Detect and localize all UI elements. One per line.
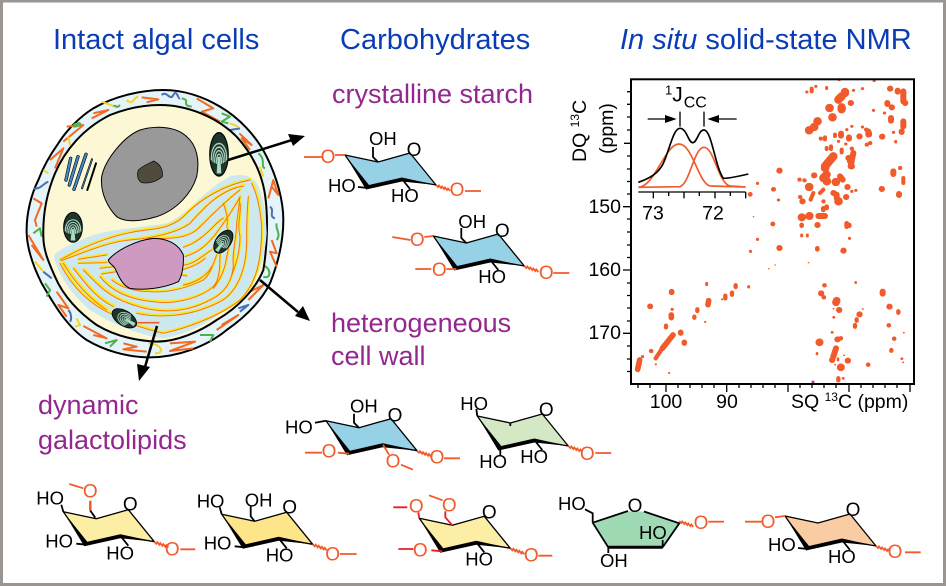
sugar: galactolipid unit 2 (197, 489, 357, 565)
y tick labels: 150 (588, 196, 621, 218)
y tick labels: 160 (588, 259, 621, 281)
upper-right peak cluster (799, 80, 905, 201)
x tick labels: 90 (716, 391, 738, 413)
sugar: galactolipid unit 1: O (83, 482, 98, 503)
y axis title: DQ (569, 133, 591, 162)
x axis title: 13 (825, 390, 838, 404)
sugar: furanose green unit: HO (558, 493, 586, 514)
heading: Carbohydrates: Carbohydrates (340, 24, 530, 56)
nucleolus (137, 161, 163, 183)
mitochondrion bottom (109, 305, 140, 332)
nucleus (101, 127, 198, 221)
inset J label: J (672, 84, 683, 107)
y tick labels (588, 196, 621, 344)
NMR spectrum panel (568, 79, 914, 413)
sugar: crystalline starch unit 2: O (495, 221, 510, 242)
experimental doublet (638, 128, 748, 182)
pyrenoid (108, 238, 183, 289)
cytoplasm (43, 105, 267, 342)
lower-right peaks (817, 282, 904, 380)
sugar: crystalline starch unit 1: O (407, 140, 421, 161)
sugar: crystalline starch unit 2: O (432, 260, 447, 281)
sugar: galactolipid unit 1: HO (45, 531, 73, 552)
sugar: cell wall blue unit: O (386, 452, 400, 473)
inset axis (638, 192, 746, 198)
x axis title: SQ (791, 391, 819, 413)
sugar: crystalline starch unit 2: OH (458, 211, 486, 232)
inset: 1J CC doublet (638, 112, 748, 198)
sugar: crystalline starch unit 1: O (450, 180, 464, 201)
sugar: galactolipid unit 2: HO (266, 544, 293, 565)
sugar: peach unit: O (888, 542, 902, 563)
sugar: galactolipid unit 1: O (165, 540, 180, 561)
sugar: cell wall green unit: O (580, 444, 595, 465)
label: crystalline starch: crystalline starch (332, 79, 533, 109)
x axis tick marks (638, 384, 910, 392)
cell wall polysaccharide squiggles (28, 93, 279, 353)
chloroplast and thylakoids (54, 175, 267, 338)
sugar: galactolipid unit 2: O (282, 497, 297, 518)
sugar: peach unit: HO (828, 546, 856, 567)
sugar: galactolipid unit 2: HO (197, 490, 224, 511)
fitted components (638, 144, 746, 187)
thylakoid membranes (60, 179, 262, 333)
sugar: peach unit: O (846, 500, 860, 521)
sugar: galactolipid unit 2: O (325, 544, 340, 565)
sugar: cell wall blue unit: OH (350, 396, 378, 417)
sugar: galactolipid unit 2: HO (204, 532, 231, 553)
sugar: cell wall green unit: O (539, 400, 554, 421)
sugar: peach unit: HO (768, 534, 796, 555)
sugar: cell wall blue unit: O (388, 406, 402, 427)
arrow to galactolipids (137, 326, 157, 381)
sugar: peach unit: O (761, 512, 775, 533)
sugar: galactolipid unit 3: HO (465, 548, 493, 569)
heading: In situ solid-state NMR: In situ solid-state NMR (620, 24, 912, 56)
sugar: galactolipid unit 2: OH (245, 489, 272, 510)
inset J label: CC (684, 95, 707, 112)
sugar: crystalline starch unit 2: O (539, 263, 554, 284)
sugar: galactolipid unit 1: HO (36, 488, 64, 509)
y tick labels: 170 (588, 322, 621, 344)
y axis unit: (ppm) (596, 103, 618, 154)
sugar: galactolipid unit 1 (36, 482, 195, 564)
sugar: galactolipid unit 3: O (524, 545, 539, 566)
y axis title: 13 (568, 114, 582, 127)
label: heterogeneous cell wall: heterogeneous (331, 308, 511, 338)
sugar: crystalline starch unit 1 (304, 128, 481, 206)
arrow to crystalline starch (228, 134, 305, 160)
lower-left peaks (638, 283, 749, 373)
sugar: galactolipid unit 3 (393, 495, 552, 569)
golgi stacks (66, 154, 96, 190)
sugar: crystalline starch unit 1: HO (391, 185, 419, 206)
y axis tick marks (623, 92, 631, 371)
algal cell diagram (27, 90, 283, 357)
sugar: furanose green unit (558, 493, 724, 571)
sugar: galactolipid unit 3: O (482, 502, 497, 523)
inset tick labels: 72 (702, 202, 724, 224)
sugar: cell wall green unit: HO (520, 446, 548, 467)
sugar: crystalline starch unit 1: O (321, 147, 335, 168)
x tick labels: 100 (650, 391, 682, 413)
label: heterogeneous cell wall: cell wall (331, 341, 426, 371)
sugar: cell wall blue unit: O (322, 442, 336, 463)
y axis title: C (569, 100, 591, 114)
J-coupling arrows (648, 112, 737, 127)
sugar: cell wall green unit: HO (460, 393, 488, 414)
sugar: peach unit (745, 500, 921, 567)
mitochondrion left (64, 212, 82, 242)
sugar: crystalline starch unit 1: OH (369, 128, 397, 149)
central and mid-diagonal peaks (750, 171, 850, 269)
arrow to cell wall (260, 280, 310, 321)
orange membrane line (137, 320, 159, 325)
cell wall (27, 90, 283, 357)
sugar: galactolipid unit 1: O (123, 495, 138, 516)
stray magenta dot (812, 380, 814, 384)
spectrum frame (631, 79, 914, 384)
label: dynamic galactolipids: galactolipids (38, 425, 187, 455)
sugar: cell wall green unit (460, 393, 611, 472)
sugar: crystalline starch unit 1: HO (328, 175, 356, 196)
sugar: cell wall green unit: HO (479, 451, 507, 472)
mitochondrion upper right (210, 133, 228, 176)
inset tick labels: 73 (642, 202, 664, 224)
sugar: crystalline starch unit 2 (392, 211, 569, 287)
mitochondrion in chloroplast (210, 227, 237, 257)
chloroplast stroma (54, 175, 267, 338)
sugar: furanose green unit: HO (639, 522, 667, 543)
sugar: crystalline starch unit 2: HO (478, 266, 506, 287)
cross-peaks (638, 80, 905, 380)
inset tick labels (642, 202, 724, 224)
sugar: galactolipid unit 3: O (409, 496, 424, 517)
sugar: furanose green unit: O (628, 496, 642, 517)
x axis title: C (ppm) (838, 391, 908, 413)
inset J label: 1 (665, 83, 672, 98)
sugar: galactolipid unit 3: O (413, 540, 428, 561)
heading: Intact algal cells: Intact algal cells (53, 24, 259, 56)
sugar: furanose green unit: OH (600, 550, 628, 571)
label: dynamic galactolipids: dynamic (38, 390, 139, 420)
sugar: cell wall blue unit: O (430, 448, 444, 469)
sugar: galactolipid unit 1: HO (106, 543, 134, 564)
sugar: cell wall blue unit: HO (285, 417, 313, 438)
sugar: furanose green unit: O (694, 513, 708, 534)
x tick labels (650, 391, 738, 413)
sugar: cell wall blue unit (285, 396, 460, 473)
sugar: crystalline starch unit 2: O (410, 230, 425, 251)
sugar: galactolipid unit 3: O (442, 495, 457, 516)
